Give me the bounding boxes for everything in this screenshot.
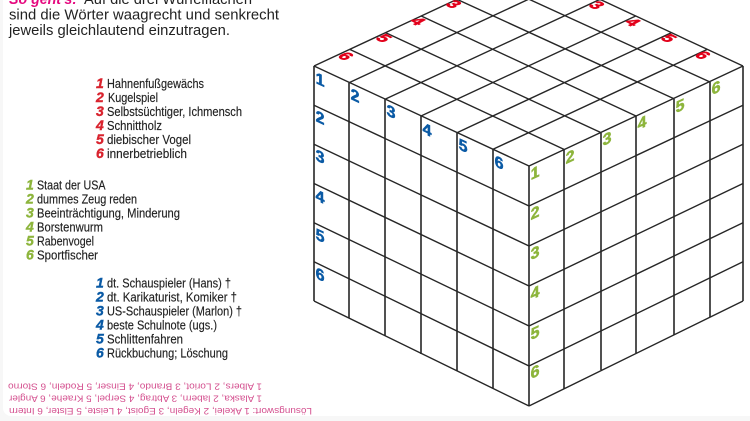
green clue list: 1 [26,176,34,192]
top face grid [314,0,743,166]
green clue list: 6 [26,246,34,262]
red clue list: 1 [96,75,104,91]
green numbers on right face: 5 [676,95,684,117]
blue clue list: US-Schauspieler (Marlon) † [107,304,242,318]
blue clue list [95,274,242,360]
green clue list [25,176,180,262]
green numbers on right face: 2 [531,202,539,224]
green clue list: Borstenwurm [37,220,103,234]
blue clue list: 3 [96,302,104,318]
green numbers on right face: 3 [603,128,611,150]
green clue list: Rabenvogel [37,234,94,248]
red clue list: Kugelspiel [108,90,158,105]
upside-down solution text: Lösungswort: 1 Akelei, 2 Kegeln, 3 Egoist, 4 Leiste, 5 Elster, 6 Intern [9,405,312,416]
right face grid [564,66,743,389]
red clue list: 5 [96,131,104,147]
upside-down solution text: 1 Alaska, 2 labern, 3 Abtrag, 4 Serpel, 5 Kraehe, 6 Angler [9,392,262,404]
blue numbers on left face: 5 [459,135,467,157]
green numbers on right face [531,77,720,383]
blue clue list: 4 [95,316,104,332]
green clue list: 3 [26,204,34,220]
red clue list: 3 [96,103,104,119]
green numbers on right face: 4 [531,281,540,304]
red clue list: 2 [95,89,104,105]
left face grid [314,66,529,406]
red clue list: Hahnenfußgewächs [107,76,204,91]
blue clue list: beste Schulnote (ugs.) [107,318,217,332]
green clue list: Beeinträchtigung, Minderung [37,206,180,220]
green numbers on right face: 6 [531,361,539,383]
blue numbers on left face: 6 [495,152,503,174]
green clue list: Sportfischer [37,248,99,262]
blue clue list: 6 [96,344,104,360]
green clue list: Staat der USA [37,178,106,192]
blue clue list: dt. Schauspieler (Hans) † [107,276,231,290]
blue clue list: 5 [96,330,104,346]
red numbers on top face [333,0,715,63]
red numbers on top face: 6 [690,49,715,62]
instructions heading: jeweils gleichlautend einzutragen. [8,22,230,39]
instructions heading: sind die Wörter waagrecht und senkrecht [9,6,280,24]
instructions heading [8,0,280,39]
green clue list: 2 [25,190,34,206]
blue numbers on left face: 6 [316,264,324,286]
blue numbers on left face: 5 [316,225,324,247]
red numbers on top face: 6 [333,50,358,63]
red clue list: 6 [96,145,104,161]
red clue list: diebischer Vogel [107,132,191,147]
blue numbers on left face: 3 [316,146,324,168]
upside-down solution text [8,380,312,416]
blue clue list: Schlittenfahren [107,332,183,346]
blue numbers on left face: 2 [351,85,359,107]
left face rows [314,105,529,406]
green numbers on right face: 4 [638,111,647,134]
blue clue list: dt. Karikaturist, Komiker † [107,290,237,304]
red clue list: Schnittholz [107,118,162,133]
red numbers on top face: 5 [656,32,681,45]
red numbers on top face: 5 [371,32,396,45]
red numbers on top face: 4 [405,15,431,28]
green numbers on right face: 3 [531,242,539,264]
blue numbers on left face: 1 [316,69,324,91]
cube grid [314,0,743,406]
blue numbers on left face: 4 [316,186,325,208]
green numbers on right face: 6 [712,77,720,99]
red numbers on top face: 4 [620,16,646,29]
green clue list: 5 [26,232,34,248]
blue numbers on left face: 4 [423,119,432,141]
blue numbers on left face [316,69,503,286]
red clue list: Selbstsüchtiger, Ichmensch [107,104,242,119]
green clue list: 4 [25,218,34,234]
green numbers on right face: 1 [531,162,539,184]
red clue list [95,75,242,161]
blue clue list: 2 [95,288,104,304]
red clue list: innerbetrieblich [107,146,187,161]
upside-down solution text: 1 Albers, 2 Loriot, 3 Brando, 4 Einser, 5 Rodeln, 6 Storno [8,380,262,392]
right face rows [529,105,743,406]
blue clue list: Rückbuchung; Löschung [107,346,228,360]
blue clue list: 1 [96,274,104,290]
blue numbers on left face: 2 [316,107,324,129]
green numbers on right face: 5 [531,322,539,344]
blue numbers on left face: 3 [387,101,395,123]
green clue list: dummes Zeug reden [37,192,137,206]
red clue list: 4 [95,117,104,133]
green numbers on right face: 2 [566,146,574,168]
